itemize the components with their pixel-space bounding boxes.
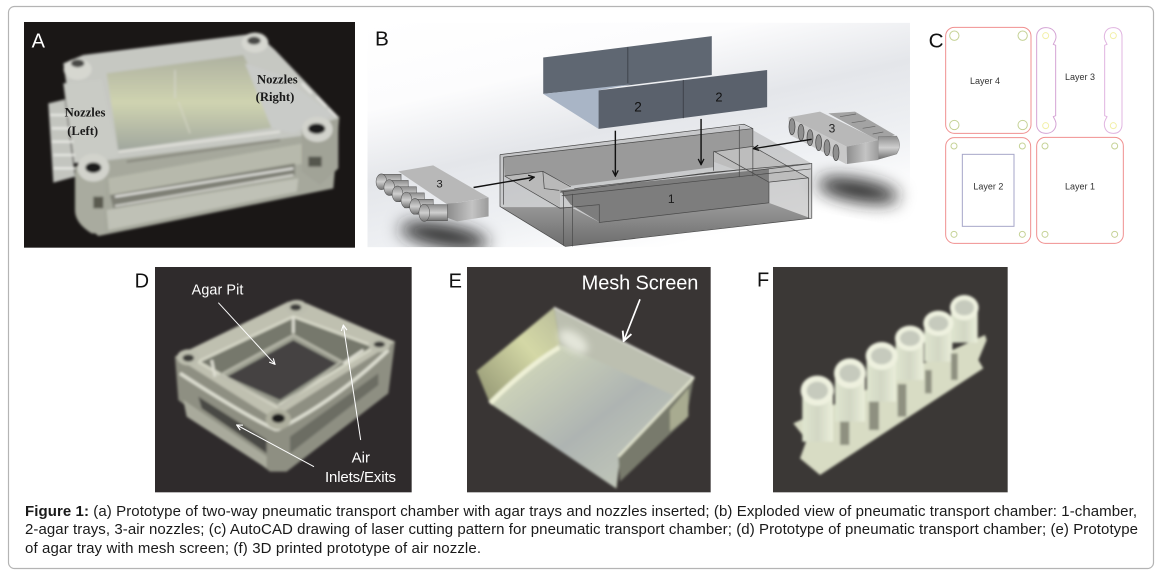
label: Mesh Screen: Mesh Screen — [582, 272, 698, 294]
label: Nozzles (Left): Nozzles — [65, 106, 105, 120]
panel A: chamber prototype photo — [24, 22, 355, 248]
label: Nozzles (Right): Nozzles — [257, 72, 298, 86]
panel C: laser cutting pattern — [929, 27, 1123, 243]
render background — [367, 23, 910, 247]
photo background — [24, 22, 355, 248]
arrow: left nozzle to chamber — [474, 177, 534, 187]
label: Air Inlets/Exits: Air — [352, 450, 370, 467]
label: Air Inlets/Exits: Inlets/Exits — [325, 469, 396, 486]
panel F: air nozzle photo — [757, 267, 1008, 492]
label: Air Inlets/Exits — [325, 450, 396, 486]
arrow: right nozzle to chamber — [753, 139, 812, 149]
caption — [25, 503, 1138, 557]
number 3 right: 3 — [829, 121, 836, 135]
tray highlight — [555, 325, 592, 358]
label: D: D — [135, 271, 149, 293]
number 2 right: 2 — [715, 89, 723, 104]
part 1: chamber — [500, 124, 812, 246]
layer 2 outline — [946, 138, 1031, 243]
label: Nozzles (Left): (Left) — [67, 124, 98, 138]
number 3 left: 3 — [436, 178, 443, 190]
layer 2 outline: Layer 2 — [973, 181, 1003, 191]
panel E: agar tray photo — [449, 267, 711, 492]
arrow: tray to chamber left — [613, 131, 617, 176]
label: A: A — [32, 30, 46, 52]
label: C: C — [929, 29, 944, 52]
arrow: Agar Pit — [218, 303, 275, 364]
empty chamber — [175, 300, 395, 472]
photo background — [467, 267, 711, 492]
panel B: exploded view — [367, 23, 910, 254]
photo background — [773, 267, 1008, 492]
label: F: F — [757, 270, 769, 292]
shadow: left nozzle — [398, 217, 490, 254]
number 2 left: 2 — [634, 99, 642, 114]
caption: 2-agar trays, 3-air nozzles; (c) AutoCAD drawing of laser cutting pattern for pneumatic transport chamber; (d) Prototype of pneumatic transport chamber; (e) Prototype — [25, 521, 1138, 538]
arrow: lower air inlet — [237, 425, 314, 467]
label: Agar Pit: Agar Pit — [192, 282, 243, 298]
photo background — [155, 267, 412, 492]
part 2: agar trays — [543, 36, 767, 129]
layer 1 outline: Layer 1 — [1065, 181, 1095, 191]
label: B: B — [375, 28, 389, 51]
caption: of agar tray with mesh screen; (f) 3D printed prototype of air nozzle. — [25, 540, 481, 557]
shadow: right nozzle — [816, 173, 901, 208]
layer 1 outline — [1037, 137, 1123, 243]
layer 3 outline — [1037, 28, 1122, 133]
label: E: E — [449, 271, 462, 293]
arrow: upper air inlet — [343, 325, 361, 440]
part 3: right nozzle — [753, 112, 900, 164]
layer 4 outline — [946, 27, 1031, 133]
number 1: 1 — [668, 192, 675, 206]
layer 3 outline: Layer 3 — [1065, 72, 1095, 82]
label: Nozzles (Right) — [256, 72, 298, 104]
layer 4 outline: Layer 4 — [970, 76, 1000, 86]
air nozzle — [793, 295, 987, 475]
part 3: left nozzle — [376, 165, 489, 221]
label: Nozzles (Right): (Right) — [256, 90, 294, 104]
arrow: tray to chamber right — [699, 119, 703, 165]
agar tray — [477, 307, 694, 488]
label: Nozzles (Left) — [65, 106, 105, 138]
panel D: chamber photo — [135, 267, 412, 492]
arrow: Mesh Screen — [624, 299, 640, 341]
caption: Figure 1: (a) Prototype of two-way pneumatic transport chamber with agar trays and nozzles inserted; (b) Exploded view of pneumatic transport chamber: 1-chamber, — [25, 503, 1137, 520]
chamber with nozzles — [48, 33, 339, 236]
